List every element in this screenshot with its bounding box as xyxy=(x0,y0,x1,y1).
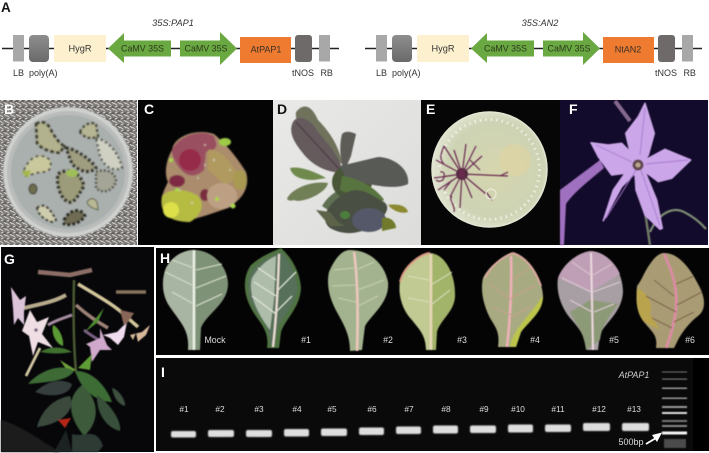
leaf labels: #6 xyxy=(685,335,695,345)
panel letter H: H xyxy=(160,250,170,266)
lane labels xyxy=(179,404,641,414)
leaf labels: #3 xyxy=(457,335,467,345)
HygR gene: HygR xyxy=(432,44,455,54)
lane labels: #3 xyxy=(254,404,264,414)
polyA element xyxy=(29,35,49,62)
tNOS element xyxy=(295,35,312,62)
construct title: 35S:PAP1 xyxy=(152,18,194,28)
tNOS element xyxy=(658,35,675,62)
stems and floral tubes xyxy=(74,280,76,372)
right CaMV 35S arrow: CaMV 35S xyxy=(185,44,228,54)
leaf labels xyxy=(204,335,695,345)
panel letter D: D xyxy=(277,101,287,117)
element captions xyxy=(13,68,333,78)
leaf: #5 xyxy=(558,251,623,350)
element captions: RB xyxy=(320,68,333,78)
panel letter I: I xyxy=(161,364,165,380)
element captions xyxy=(376,68,696,78)
flower corolla xyxy=(591,103,691,229)
panel H: leaves xyxy=(156,248,709,355)
element captions: RB xyxy=(683,68,696,78)
500bp label: 500bp xyxy=(618,437,644,447)
element captions: poly(A) xyxy=(392,68,421,78)
element captions: tNOS xyxy=(655,68,677,78)
leaf: #3 xyxy=(400,253,455,350)
HygR gene: HygR xyxy=(69,44,92,54)
panel A label: A xyxy=(1,0,11,15)
panel F: purple flower xyxy=(560,100,708,245)
left CaMV 35S arrow xyxy=(471,33,534,63)
pink flowers xyxy=(11,287,26,325)
leaf: #6 xyxy=(637,253,704,348)
leaf labels: Mock xyxy=(204,335,226,345)
lane labels: #2 xyxy=(215,404,225,414)
green leaves xyxy=(53,325,63,346)
right CaMV 35S arrow xyxy=(180,32,237,65)
lane labels: #13 xyxy=(627,404,641,414)
panel I: agarose gel xyxy=(156,358,709,451)
arrow to 500bp band xyxy=(646,432,662,444)
leaf: Mock xyxy=(163,250,228,350)
left CaMV 35S arrow xyxy=(108,33,171,63)
lane labels: #1 xyxy=(179,404,189,414)
element captions: poly(A) xyxy=(29,68,58,78)
leaf labels: #4 xyxy=(530,335,540,345)
RB element xyxy=(682,35,693,62)
panel letter F: F xyxy=(569,101,578,117)
gene label: AtPAP1 xyxy=(618,370,649,380)
leaf: #4 xyxy=(482,253,543,347)
leaf labels: #5 xyxy=(609,335,619,345)
panel E: purple roots in culture vessel xyxy=(421,100,560,245)
lane labels: #12 xyxy=(592,404,606,414)
HygR gene xyxy=(54,35,106,62)
lane labels: #11 xyxy=(551,404,565,414)
leaf labels: #1 xyxy=(301,335,311,345)
construct title: 35S:AN2 xyxy=(522,18,558,28)
upright leaves xyxy=(296,106,342,164)
construct diagram: 35S:PAP1 xyxy=(2,18,339,78)
PCR bands xyxy=(171,423,649,438)
left CaMV 35S arrow: CaMV 35S xyxy=(121,44,164,54)
lane labels: #6 xyxy=(367,404,377,414)
panel G: flowering tobacco plant xyxy=(1,247,154,452)
lane labels: #4 xyxy=(292,404,302,414)
lane labels: #5 xyxy=(327,404,337,414)
element captions: LB xyxy=(376,68,387,78)
lane labels: #7 xyxy=(404,404,414,414)
panel letter C: C xyxy=(144,101,154,117)
panel letter E: E xyxy=(426,101,435,117)
lane labels: #10 xyxy=(511,404,525,414)
AtPAP1 gene xyxy=(240,37,291,63)
DNA ladder xyxy=(662,372,687,448)
right CaMV 35S arrow xyxy=(543,32,600,65)
leaf: #2 xyxy=(328,250,388,351)
panel C: red callus xyxy=(138,100,273,245)
panel B: callus on petri dish xyxy=(0,100,137,245)
element captions: tNOS xyxy=(292,68,314,78)
NtAN2 gene xyxy=(603,37,654,63)
NtAN2 gene: NtAN2 xyxy=(615,44,641,54)
panel letter B: B xyxy=(4,101,14,117)
lane labels: #9 xyxy=(479,404,489,414)
element captions: LB xyxy=(13,68,24,78)
polyA element xyxy=(392,35,412,62)
panel letter G: G xyxy=(4,251,15,267)
LB element xyxy=(13,35,24,62)
lane labels: #8 xyxy=(441,404,451,414)
RB element xyxy=(319,35,330,62)
stems xyxy=(560,160,604,245)
leaf labels: #2 xyxy=(383,335,393,345)
HygR gene xyxy=(417,35,469,62)
construct diagram: 35S:AN2 xyxy=(365,18,702,78)
panel D: regenerated plantlet xyxy=(273,100,421,245)
right CaMV 35S arrow: CaMV 35S xyxy=(548,44,591,54)
left CaMV 35S arrow: CaMV 35S xyxy=(484,44,527,54)
LB element xyxy=(376,35,387,62)
roots xyxy=(434,144,508,212)
AtPAP1 gene: AtPAP1 xyxy=(251,44,281,54)
central rosette xyxy=(332,164,372,200)
leaf: #1 xyxy=(245,248,301,348)
